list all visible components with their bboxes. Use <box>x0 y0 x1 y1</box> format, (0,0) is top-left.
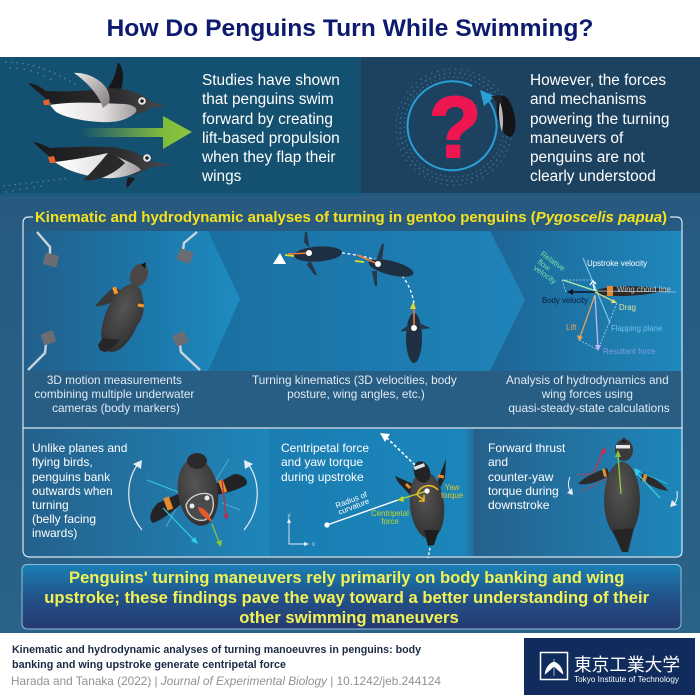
green arrowhead <box>615 450 621 457</box>
banking arrow left <box>129 464 142 530</box>
beak <box>198 507 212 522</box>
text: banking: Unlike planes and <box>32 441 127 455</box>
axis x label: x <box>312 542 315 548</box>
bubbles left top <box>6 62 78 86</box>
body <box>173 456 223 528</box>
wing <box>597 286 670 296</box>
panel: turning kinematics chevron <box>208 231 525 371</box>
banking arrowhead left <box>133 460 142 469</box>
logo: Tokyo Institute of Technology <box>524 638 695 695</box>
label: relative: Relative <box>539 249 567 273</box>
text: forward swimming: wings <box>201 168 242 185</box>
body <box>604 462 640 538</box>
drag arrowhead <box>611 299 617 303</box>
label: radius of curvature: curvature <box>337 497 371 517</box>
penguin C <box>401 302 429 363</box>
text: forward swimming: that penguins swim <box>202 91 334 108</box>
panel: lower row banking <box>24 429 269 556</box>
penguin B <box>355 244 415 286</box>
camera bottom right <box>172 331 200 370</box>
drag arrow <box>595 292 615 302</box>
relative flow arrow <box>563 280 596 291</box>
text: thrust: Forward thrust <box>488 441 566 455</box>
label: flow: flow <box>536 257 553 273</box>
camera top right <box>176 232 197 264</box>
body velocity arrow <box>570 291 596 293</box>
label: body velocity: Body velocity <box>542 296 588 305</box>
head <box>411 459 433 485</box>
cyan arrowhead <box>191 537 198 544</box>
text: banking: (belly facing <box>32 512 96 526</box>
logo emblem <box>540 652 568 680</box>
penguin: upstroke <box>28 62 166 122</box>
y axis tip <box>287 518 291 523</box>
illustration: cameras and penguin <box>28 232 200 370</box>
logo Japanese name: 東京工業大学 <box>574 655 680 675</box>
label: velocity: velocity <box>532 263 558 286</box>
text: centripetal: and yaw torque <box>281 455 363 469</box>
panel: lower row upstroke <box>269 429 474 556</box>
main section background <box>0 196 700 633</box>
illustration: banking penguin <box>129 453 257 547</box>
head <box>615 439 633 461</box>
yaw arrow <box>417 495 424 501</box>
lift arrow <box>580 295 595 337</box>
banking arrow right <box>244 464 257 530</box>
label: centripetal force: force <box>381 517 399 526</box>
citation title line 2: banking and wing upstroke generate centripetal force <box>12 659 286 671</box>
label: wing chord line: Wing chord line <box>617 285 671 294</box>
red arrowhead <box>600 447 606 454</box>
red arrow <box>594 451 603 472</box>
text: forward swimming: forward by creating <box>202 111 333 128</box>
curved arrowhead left <box>567 488 573 495</box>
centripetal arrowhead <box>397 496 404 502</box>
text: forward swimming: lift-based propulsion <box>202 130 340 147</box>
red arrow <box>222 480 226 516</box>
dashed direction <box>387 438 415 465</box>
text: centripetal: during upstroke <box>281 470 364 484</box>
flight path <box>309 252 414 304</box>
panel: hydrodynamic analysis background <box>490 231 682 371</box>
force dashed lines <box>562 280 617 350</box>
panel: motion measurement chevron <box>24 231 240 371</box>
x axis tip <box>304 542 309 546</box>
label: resultant force: Resultant force <box>603 347 655 356</box>
tail <box>424 530 439 546</box>
tail <box>612 528 634 552</box>
cyan arrowhead <box>634 468 641 476</box>
text: forward swimming: Studies have shown <box>202 72 340 89</box>
resultant arrow <box>595 295 598 347</box>
curved arrow left <box>568 477 571 492</box>
thin vector lines <box>147 459 240 527</box>
direction arrowhead <box>380 433 390 442</box>
illustration: downstroke penguin <box>567 437 677 552</box>
label: flapping plane: Flapping plane <box>611 324 662 333</box>
conclusion text: other swimming maneuvers <box>239 608 459 627</box>
caption: motion measurement: 3D motion measurements <box>47 373 182 387</box>
wings <box>395 459 446 495</box>
cyan arrow <box>163 508 194 540</box>
section heading: Kinematic and hydrodynamic analyses of turning in gentoo penguins (Pygoscelis papua) <box>35 209 667 226</box>
question mark: ? <box>429 80 481 176</box>
wing right <box>214 474 247 495</box>
label: centripetal force: Centripetal <box>371 509 409 518</box>
circular arrow <box>408 81 497 170</box>
body <box>407 469 447 541</box>
wing bands <box>406 476 444 488</box>
body velocity arrowhead <box>567 289 573 295</box>
measured penguin <box>93 261 152 358</box>
text: banking: flying birds, <box>32 455 93 469</box>
caption: motion measurement: cameras (body markers) <box>52 401 180 415</box>
text: centripetal: Centripetal force <box>281 441 369 455</box>
text: unknown turning: clearly understood <box>530 168 656 185</box>
green arrow <box>212 524 219 542</box>
chart: wing force diagram <box>532 249 676 356</box>
panel: lower row downstroke <box>474 429 682 556</box>
arrowhead <box>480 90 495 106</box>
lift arrowhead <box>577 335 583 341</box>
citation source: Harada and Tanaka (2022) | Journal of Experimental Biology | 10.1242/jeb.244124 <box>11 674 441 688</box>
text: unknown turning: penguins are not <box>530 149 645 166</box>
label: yaw torque: torque <box>441 491 463 500</box>
illustration: turning kinematics <box>273 232 429 363</box>
text: unknown turning: powering the turning <box>530 111 669 128</box>
cyan arrow <box>636 472 660 498</box>
cyan ray <box>147 480 178 492</box>
text: thrust: downstroke <box>488 498 550 512</box>
panel: forward swimming <box>0 57 362 196</box>
upstroke arrow <box>590 281 596 291</box>
title: How Do Penguins Turn While Swimming? <box>106 15 594 42</box>
wing right <box>640 472 668 491</box>
panel: unknown turning <box>361 57 700 196</box>
text: thrust: and <box>488 455 508 469</box>
text: unknown turning: However, the forces <box>530 72 666 89</box>
cyan thin line <box>640 472 668 484</box>
axes <box>289 522 307 544</box>
text: banking: turning <box>32 498 69 512</box>
caption: hydrodynamics: Analysis of hydrodynamics and <box>506 373 669 387</box>
caption: turning kinematics: Turning kinematics (3D velocities, body <box>252 373 457 387</box>
section frame <box>23 217 682 557</box>
wing left <box>578 468 610 484</box>
caption: turning kinematics: posture, wing angles, etc.) <box>287 387 425 401</box>
label: yaw torque: Yaw <box>445 483 460 492</box>
text: thrust: counter-yaw <box>488 470 554 484</box>
penguin A <box>285 232 342 275</box>
yaw arc <box>417 486 438 495</box>
radius line <box>327 500 398 525</box>
logo English name: Tokyo Institute of Technology <box>574 674 680 684</box>
thin red lines <box>578 472 608 492</box>
start marker <box>273 253 286 264</box>
bubble ring <box>396 69 512 185</box>
head markings <box>186 493 213 520</box>
arrow: forward motion <box>80 116 192 149</box>
label: radius of curvature: Radius of <box>334 490 369 510</box>
text: banking: penguins bank <box>32 470 111 484</box>
caption: motion measurement: combining multiple underwater <box>34 387 194 401</box>
bubbles left bottom <box>4 178 70 192</box>
conclusion text: Penguins' turning maneuvers rely primarily on body banking and wing <box>69 568 624 587</box>
panel: conclusion <box>22 564 681 629</box>
banking arrowhead right <box>244 460 253 469</box>
camera bottom left <box>28 330 57 370</box>
center marker <box>424 488 430 494</box>
text: thrust: torque during <box>488 484 559 498</box>
centripetal arrow <box>401 491 427 499</box>
caption: hydrodynamics: quasi-steady-state calculations <box>508 401 670 415</box>
text: unknown turning: maneuvers of <box>530 130 624 147</box>
green arrow <box>618 455 621 494</box>
dashed bottom <box>428 548 430 558</box>
citation title line 1: Kinematic and hydrodynamic analyses of turning manoeuvres in penguins: body <box>12 644 422 656</box>
green arrowhead <box>216 540 222 547</box>
penguin: downstroke <box>33 142 171 188</box>
curved arrowhead right <box>670 500 677 507</box>
radius start <box>324 522 330 528</box>
label: upstroke velocity: Upstroke velocity <box>587 259 647 268</box>
flapping plane line <box>583 258 610 323</box>
text: forward swimming: when they flap their <box>201 149 335 166</box>
label: lift: Lift <box>566 323 577 332</box>
axis y label: y <box>288 513 290 519</box>
wing left <box>150 494 182 523</box>
camera top left <box>37 232 59 268</box>
red arrowhead <box>223 514 229 520</box>
citation <box>11 644 441 688</box>
caption: hydrodynamics: wing forces using <box>541 387 633 401</box>
curved arrow right <box>674 491 677 504</box>
resultant arrowhead <box>595 345 601 351</box>
conclusion text: upstroke; these findings pave the way toward a better understanding of their <box>44 588 650 607</box>
label: drag: Drag <box>619 303 636 312</box>
tail <box>187 453 207 469</box>
text: unknown turning: and mechanisms <box>530 91 647 108</box>
illustration: upstroke penguin <box>287 433 463 558</box>
text: banking: inwards) <box>32 526 77 540</box>
small penguin <box>491 94 519 138</box>
text: banking: outwards when <box>32 484 113 498</box>
